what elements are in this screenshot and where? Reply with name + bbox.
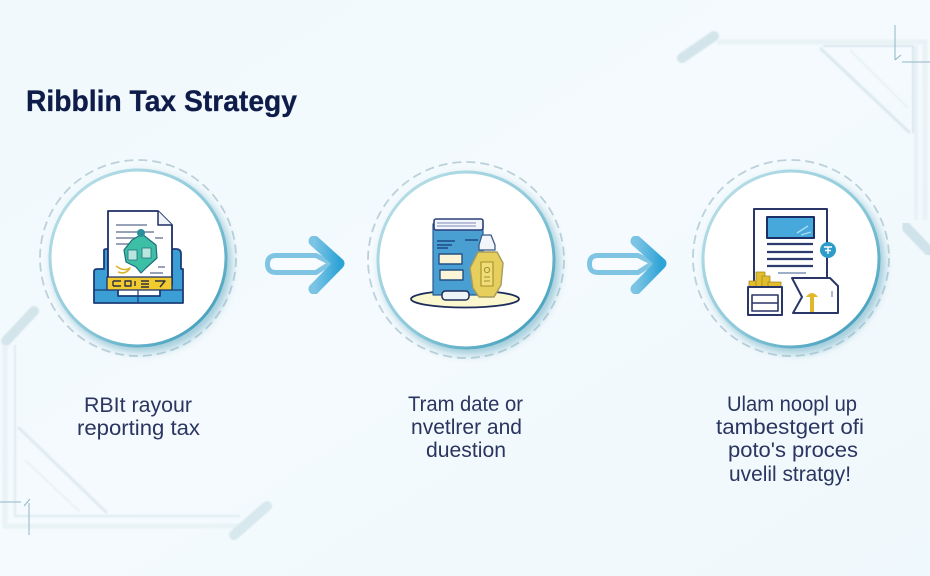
- arrow 1: [268, 241, 339, 289]
- step 3 caption: poto's proces: [728, 439, 858, 462]
- icon: tax document on sofa: [94, 211, 183, 303]
- decoration: right edge bar: [905, 226, 930, 252]
- decoration: bottom left frame: [5, 311, 267, 535]
- step 2 caption: [408, 393, 523, 462]
- step 3 caption: Ulam noopl up: [727, 393, 857, 416]
- decoration: top right frame: [682, 36, 925, 220]
- step 3 caption: tambestgert ofi: [716, 416, 864, 439]
- step 3 caption: [716, 393, 864, 486]
- step 2 caption: duestion: [426, 439, 506, 462]
- step 2 caption: Tram date or: [408, 393, 523, 416]
- step 3 circle: [693, 160, 889, 356]
- icon: report, coins and envelope: [748, 209, 838, 315]
- step 3 caption: uvelil stratgy!: [729, 463, 851, 486]
- step 1 caption: RBIt rayour: [84, 394, 192, 417]
- step 2 caption: nvetlrer and: [411, 416, 522, 439]
- title: Ribblin Tax Strategy: [26, 85, 298, 118]
- step 1 caption: reporting tax: [77, 417, 201, 440]
- decoration: top right tick marks: [895, 25, 930, 62]
- icon: book and bottle on plate: [411, 219, 519, 308]
- step 1 caption: [77, 394, 201, 440]
- step 1 circle: [40, 160, 236, 356]
- arrow 2: [590, 241, 661, 289]
- decoration: bottom left tick marks: [0, 499, 30, 535]
- coin pile: [749, 272, 781, 287]
- step 2 circle: [368, 162, 564, 358]
